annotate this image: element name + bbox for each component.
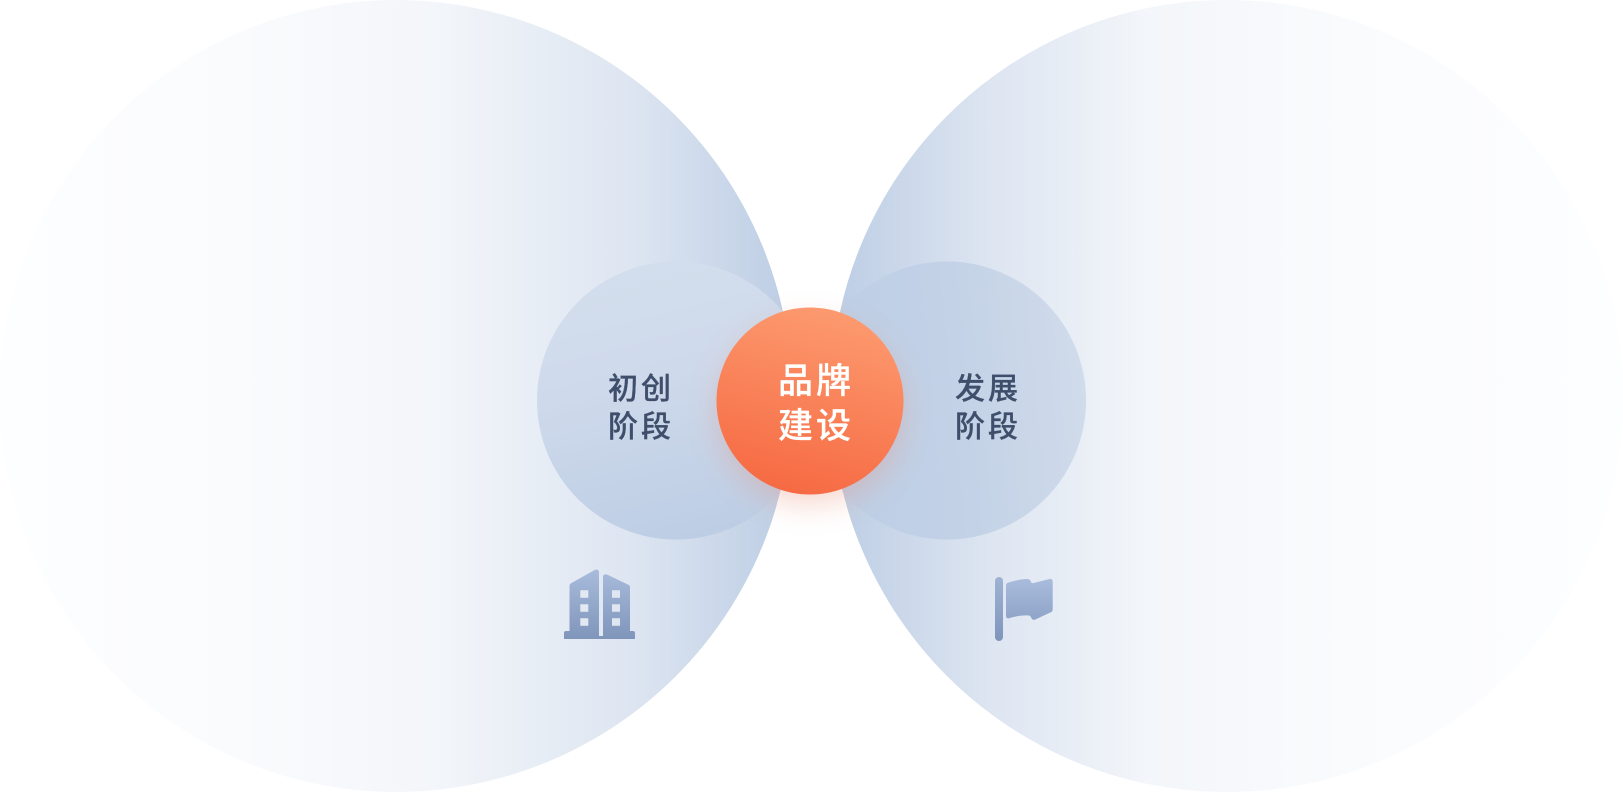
label: early stage: 初创	[608, 373, 674, 406]
icon: flag	[995, 577, 1053, 641]
panel: left stage circle	[537, 266, 782, 540]
shadow: center circle glow	[720, 323, 900, 503]
icon: office buildings	[564, 569, 635, 639]
label: center brand building: 建设	[778, 407, 854, 446]
label: growth stage: 阶段	[955, 411, 1021, 444]
center circle	[716, 308, 904, 494]
label: center brand building: 品牌	[778, 362, 854, 401]
panel: left large circle	[0, 0, 792, 792]
infographic: brand building stages	[324, 0, 1260, 792]
panel: right stage circle	[842, 262, 1086, 540]
label: growth stage: 发展	[955, 373, 1021, 406]
panel: right large circle	[831, 0, 1623, 792]
label: early stage: 阶段	[608, 411, 674, 444]
